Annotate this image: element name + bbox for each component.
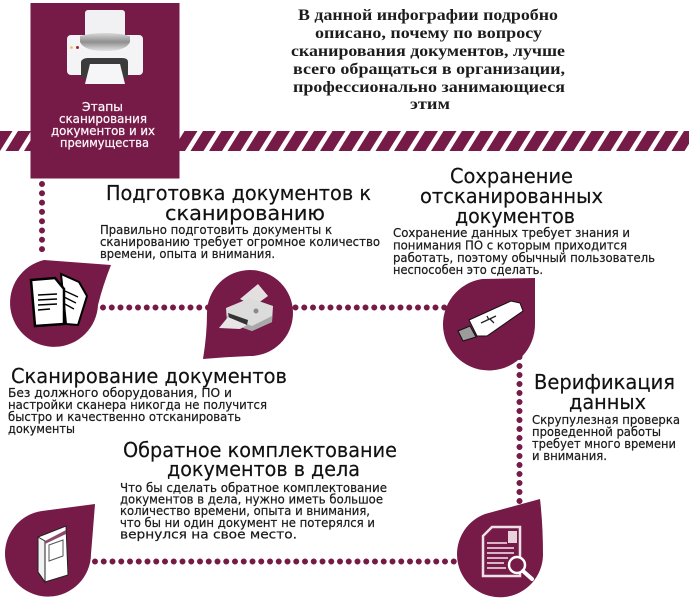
panel: binding heading <box>123 438 397 481</box>
saving text: понимания ПО с которым приходится <box>393 238 627 252</box>
panel: saving heading <box>420 164 603 228</box>
panel: preparation heading: Подготовка документов к <box>106 181 371 205</box>
scanning text <box>8 386 267 436</box>
verification text: проведенной работы <box>532 425 661 439</box>
panel: binding heading: Обратное комплектование <box>123 438 397 462</box>
scanning text: документы <box>8 422 75 436</box>
verification text: и внимания. <box>532 449 607 463</box>
title label <box>51 100 155 150</box>
intro text: профессионально занимающиеся <box>293 79 565 96</box>
saving text: Сохранение данных требует знания и <box>393 226 630 240</box>
dotted connector: first to third step <box>103 304 445 310</box>
saving text: неспособен это сделать. <box>393 263 543 277</box>
teardrop: binder <box>5 504 95 597</box>
verification text <box>532 413 680 463</box>
panel: preparation heading <box>106 181 371 225</box>
intro text: В данной инфографии подробно <box>298 7 558 24</box>
teardrop: documents <box>10 260 111 347</box>
binding text: Что бы сделать обратное комплектование <box>120 481 387 495</box>
dotted connector: square to first step <box>39 184 45 258</box>
icon: document with magnifier <box>483 527 532 579</box>
panel: preparation heading: сканированию <box>165 201 325 225</box>
intro text: этим <box>410 96 451 113</box>
saving text <box>393 226 655 277</box>
panel: saving heading: документов <box>455 204 575 228</box>
panel: scanning heading: Сканирование документов <box>11 364 287 388</box>
title label: документов и их <box>51 124 155 138</box>
dotted connector: third to fourth step <box>516 357 522 506</box>
panel: saving heading: Сохранение <box>450 164 573 188</box>
intro text: описано, почему по вопросу <box>315 25 542 42</box>
panel: saving heading: отсканированных <box>420 184 603 208</box>
binding text: что бы ни один документ не потерялся и <box>120 516 375 530</box>
panel: title square <box>30 3 180 178</box>
preparation text: Правильно подготовить документы к <box>100 223 332 237</box>
icon: small printer <box>219 284 273 331</box>
panel: verification heading <box>534 370 675 414</box>
teardrop: USB <box>443 278 535 370</box>
title label: сканирования <box>59 112 147 126</box>
panel: binding heading: документов в дела <box>167 457 360 481</box>
scanning text: Без должного оборудования, ПО и <box>8 386 232 400</box>
intro text: сканирования документов, лучше <box>291 43 565 60</box>
dotted connector: fourth to fifth step <box>95 558 458 564</box>
preparation text: сканированию требует огромное количество <box>100 235 380 249</box>
scanning text: быстро и качественно отсканировать <box>8 410 241 424</box>
preparation text <box>100 223 380 261</box>
title label: преимущества <box>60 136 149 150</box>
binding text: количество времени, опыта и внимания, <box>120 504 370 518</box>
icon: main printer <box>67 10 143 84</box>
panel: verification heading: данных <box>569 390 646 414</box>
striped band <box>0 131 689 151</box>
binding text <box>120 481 387 542</box>
verification text: Скрупулезная проверка <box>532 413 680 427</box>
binding text: вернулся на свое место. <box>120 528 297 542</box>
binding text: документов в дела, нужно иметь большое <box>120 492 383 506</box>
teardrop: scanner <box>203 270 293 359</box>
icon: binder <box>38 526 68 582</box>
saving text: работать, поэтому обычный пользователь <box>393 251 655 265</box>
title label: Этапы <box>82 100 123 114</box>
panel: verification heading: Верификация <box>534 370 675 394</box>
teardrop: verification document <box>457 499 543 597</box>
verification text: требует много времени <box>532 437 676 451</box>
icon: paper sheets <box>31 274 87 326</box>
preparation text: времени, опыта и внимания. <box>100 247 275 261</box>
intro text: всего обращаться в организации, <box>293 61 565 78</box>
intro text <box>291 7 565 113</box>
icon: USB drive <box>458 301 523 341</box>
scanning text: настройки сканера никогда не получится <box>8 398 267 412</box>
